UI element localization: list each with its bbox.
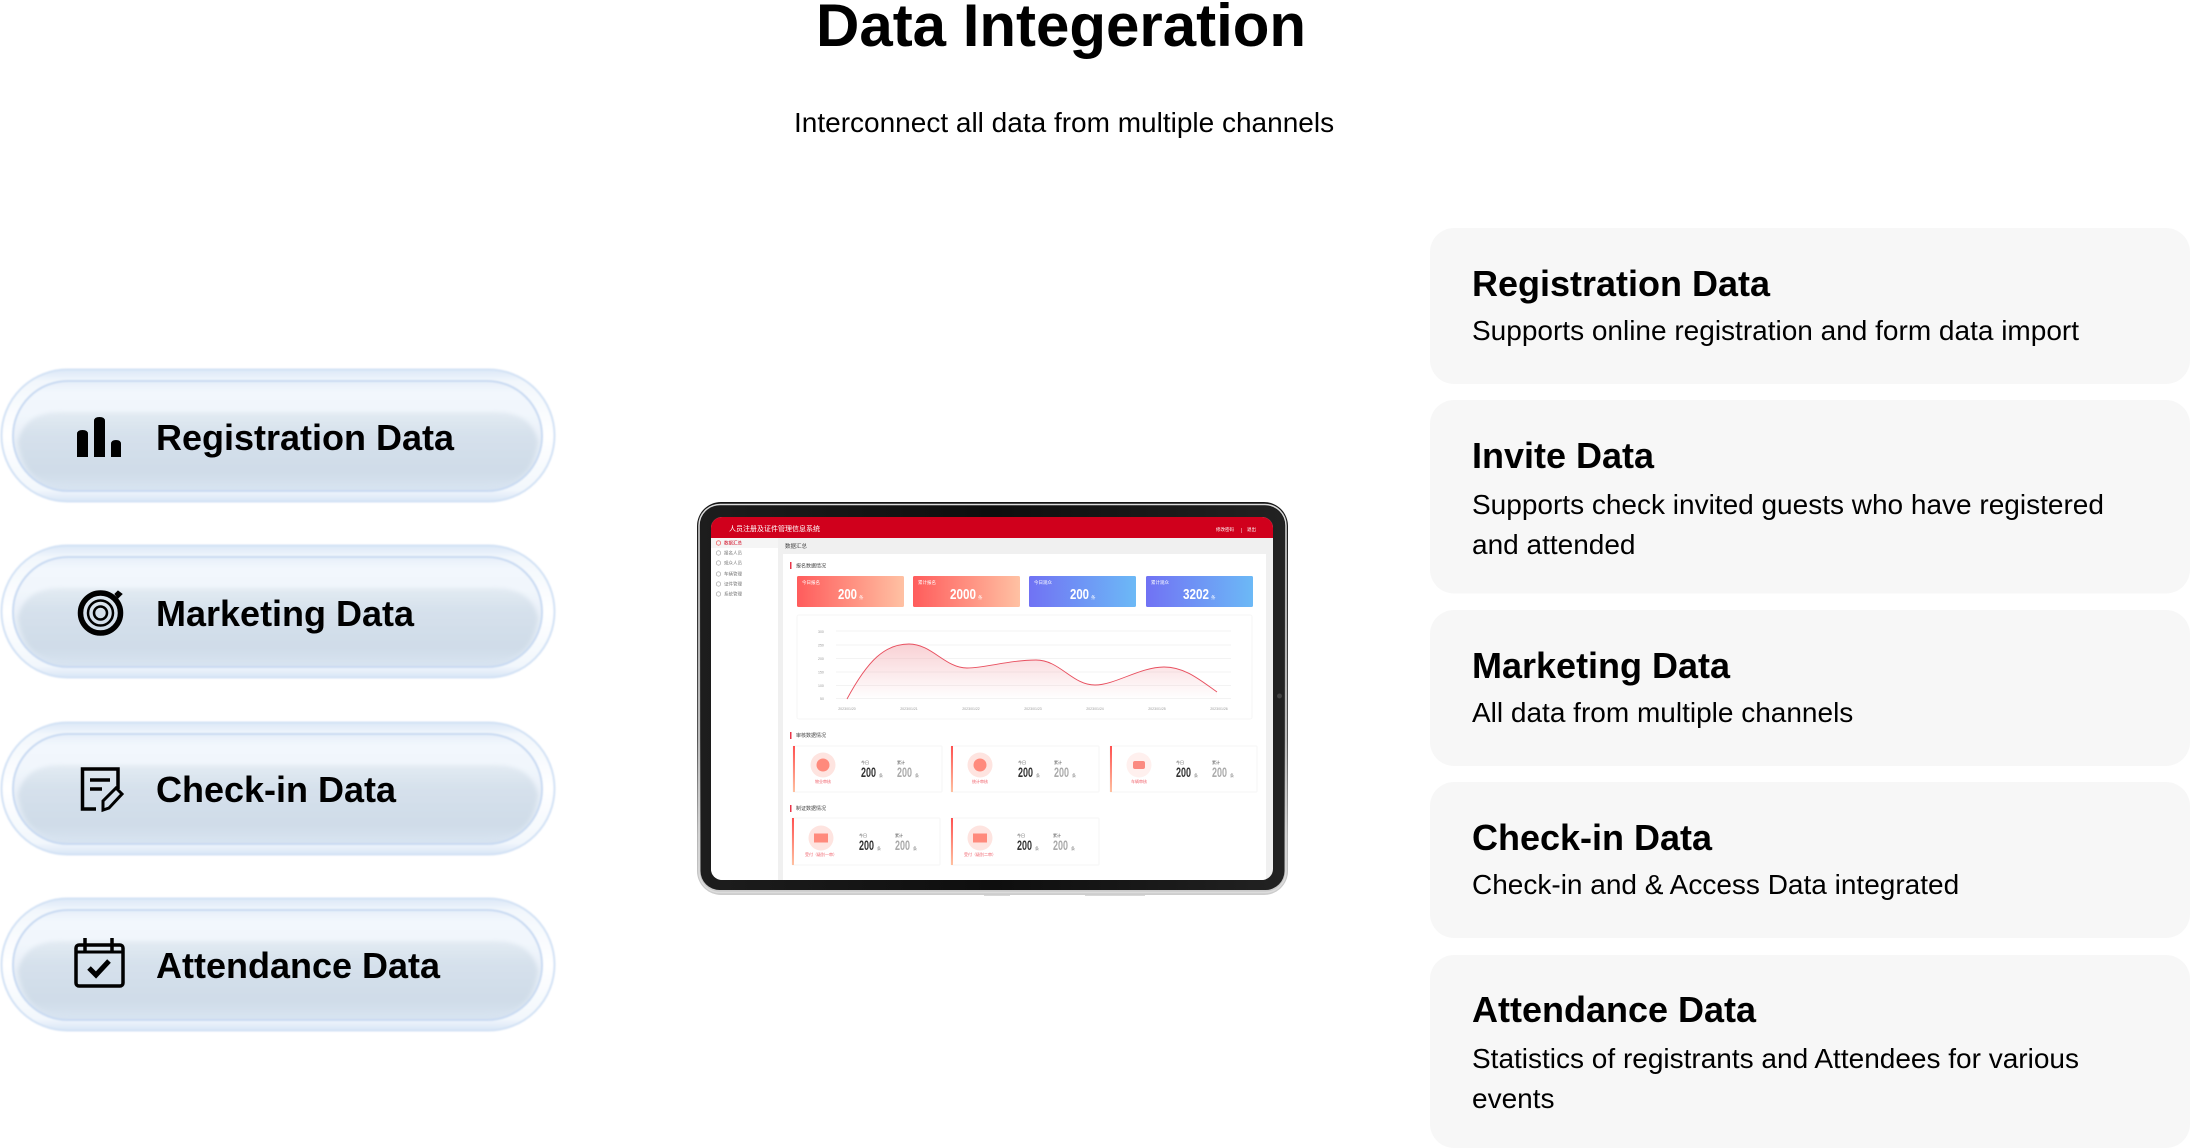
mini card: certificate 1: 200 — [895, 837, 910, 853]
mini card: certificate 1: 200 — [859, 837, 874, 853]
card: invite data: Invite Data — [1472, 435, 1655, 476]
mini card: certificate 2 — [951, 818, 1099, 865]
dashboard header: 人员注册及证件管理信息系统 — [729, 524, 820, 533]
mini card: certificate 2: 累计 — [1053, 832, 1061, 838]
mini card: verification 3: 条 — [1194, 772, 1198, 778]
area chart: 2023/01/26 — [1210, 707, 1228, 711]
icon: form with pencil — [82, 769, 122, 810]
dashboard sidebar: 数据汇总 — [724, 540, 742, 546]
mini card: verification 1: 200 — [861, 764, 876, 780]
mini card: verification 1: 物业审核 — [815, 778, 831, 784]
mini card: verification 3: 累计 — [1212, 759, 1220, 765]
pill: check-in data: Check-in Data — [156, 769, 397, 810]
card: check-in data: Check-in and & Access Data integrated — [1472, 869, 1959, 900]
pill: marketing data — [2, 546, 554, 678]
stat card: 3202: 3202 — [1183, 586, 1209, 603]
mini card: verification 3: 200 — [1212, 764, 1227, 780]
mini card: certificate 2: 200 — [1017, 837, 1032, 853]
mini card: verification 1: 条 — [915, 772, 919, 778]
stat card: 3202 — [1146, 576, 1253, 607]
mini card: certificate 1: 条 — [877, 845, 881, 851]
card: registration data: Supports online registration and form data import — [1472, 315, 2079, 346]
section: registration statistics: 报名数据情况 — [796, 562, 826, 570]
card: registration data — [1430, 228, 2190, 384]
mini card: verification 1 — [793, 746, 942, 792]
card: marketing data — [1430, 610, 2190, 766]
mini card: verification 2: 统计审核 — [972, 778, 988, 784]
panel: descriptions — [1430, 228, 2190, 1148]
stat card: 3202: 累计观众 — [1151, 579, 1169, 586]
mini card: verification 1: 条 — [879, 772, 883, 778]
dashboard sidebar: 证件管理 — [724, 580, 742, 588]
subtitle: Interconnect all data from multiple channels — [794, 107, 1334, 138]
dashboard sidebar: 车辆管理 — [724, 570, 742, 578]
page heading: 数据汇总 — [785, 542, 808, 550]
mini card: verification 2: 200 — [1054, 764, 1069, 780]
pill: attendance data — [2, 898, 554, 1030]
stat card: 200 — [797, 576, 904, 607]
stat card: 200: 今日报名 — [802, 579, 820, 586]
mini card: certificate 2: 200 — [1053, 837, 1068, 853]
area chart: 100 — [818, 684, 824, 688]
mini card: certificate 1: 今日 — [859, 832, 867, 838]
dashboard sidebar: 报名人员 — [724, 550, 742, 556]
card: check-in data: Check-in Data — [1472, 817, 1713, 858]
mini card: verification 3: 车辆审核 — [1131, 778, 1147, 784]
mini card: verification 1: 今日 — [861, 759, 869, 765]
card: attendance data: Statistics of registrants and Attendees for various — [1472, 1043, 2079, 1074]
card: marketing data: All data from multiple channels — [1472, 697, 1853, 728]
dashboard sidebar: 系统管理 — [724, 590, 742, 598]
mini card: verification 3: 200 — [1176, 764, 1191, 780]
card: check-in data — [1430, 782, 2190, 938]
stat card: 200: 条 — [1091, 594, 1096, 600]
stat card: 200: 今日观众 — [1034, 579, 1052, 586]
stat card: 200 — [1029, 576, 1136, 607]
section: registration statistics — [790, 562, 826, 570]
dashboard sidebar — [711, 538, 778, 880]
dashboard header: 修改密码 — [1216, 526, 1234, 533]
stat card: 2000: 条 — [978, 594, 983, 600]
mini card: certificate 1: 累计 — [895, 832, 903, 838]
pill: registration data — [2, 370, 554, 502]
card: registration data: Registration Data — [1472, 263, 1771, 304]
mini card: verification 2: 今日 — [1018, 759, 1026, 765]
section: verification statistics: 审核数据情况 — [796, 732, 826, 739]
mini card: certificate 2: 今日 — [1017, 832, 1025, 838]
area chart: 50 — [820, 697, 824, 701]
stat card: 200: 条 — [859, 594, 864, 600]
area chart: 150 — [818, 670, 824, 674]
tablet mockup — [697, 502, 1288, 896]
card: attendance data: events — [1472, 1083, 1554, 1114]
panel: data source pills — [2, 370, 554, 1030]
mini card: certificate 2: 条 — [1071, 845, 1075, 851]
stat card: 200: 200 — [1070, 586, 1089, 603]
card: marketing data: Marketing Data — [1472, 645, 1731, 686]
pill: marketing data: Marketing Data — [156, 593, 415, 634]
area chart: 2023/01/20 — [838, 707, 856, 711]
card: invite data: Supports check invited guests who have registered — [1472, 489, 2104, 520]
dashboard sidebar: 观众人员 — [724, 560, 742, 566]
icon: target — [80, 591, 122, 633]
card: invite data: and attended — [1472, 529, 1636, 560]
card: invite data — [1430, 400, 2190, 594]
mini card: verification 2: 200 — [1018, 764, 1033, 780]
stat card: 2000: 累计报名 — [918, 579, 936, 586]
tablet frame — [697, 502, 1288, 896]
mini card: verification 2: 条 — [1036, 772, 1040, 778]
icon: bar chart — [77, 417, 121, 457]
area chart: 2023/01/23 — [1024, 707, 1042, 711]
area chart: 200 — [818, 657, 824, 661]
mini card: certificate 2: 条 — [1035, 845, 1039, 851]
pill: check-in data — [2, 722, 554, 854]
mini card: verification 1: 200 — [897, 764, 912, 780]
mini card: certificate 2: 受付（级别二审） — [964, 851, 996, 857]
area chart: 2023/01/21 — [900, 707, 918, 711]
mini card: certificate 1 — [792, 818, 940, 865]
icon: calendar check — [76, 938, 123, 986]
tablet screen: dashboard — [711, 517, 1273, 880]
stat card: 2000: 2000 — [950, 586, 976, 603]
card: attendance data: Attendance Data — [1472, 989, 1757, 1030]
card: attendance data — [1430, 955, 2190, 1148]
pill: attendance data: Attendance Data — [156, 945, 441, 986]
area chart: 2023/01/24 — [1086, 707, 1104, 711]
stat card: 3202: 条 — [1211, 594, 1216, 600]
area chart: 2023/01/25 — [1148, 707, 1166, 711]
dashboard header: 退出 — [1247, 526, 1256, 533]
pill: registration data: Registration Data — [156, 417, 455, 458]
mini card: verification 3: 今日 — [1176, 759, 1184, 765]
section: certificate statistics: 制证数据情况 — [796, 805, 826, 812]
mini card: verification 2: 条 — [1072, 772, 1076, 778]
mini card: verification 2 — [951, 746, 1099, 792]
area chart: 250 — [818, 644, 824, 648]
mini card: verification 3 — [1110, 746, 1257, 792]
area chart — [797, 615, 1252, 719]
dashboard header — [711, 517, 1273, 538]
stat card: 2000 — [913, 576, 1020, 607]
mini card: certificate 1: 受付（级别一审） — [805, 851, 837, 857]
stat card: 200: 200 — [838, 586, 857, 603]
area chart: 2023/01/22 — [962, 707, 980, 711]
mini card: verification 3: 条 — [1230, 772, 1234, 778]
mini card: certificate 1: 条 — [913, 845, 917, 851]
area chart: 300 — [818, 630, 824, 634]
mini card: verification 1: 累计 — [897, 759, 905, 765]
mini card: verification 2: 累计 — [1054, 759, 1062, 765]
